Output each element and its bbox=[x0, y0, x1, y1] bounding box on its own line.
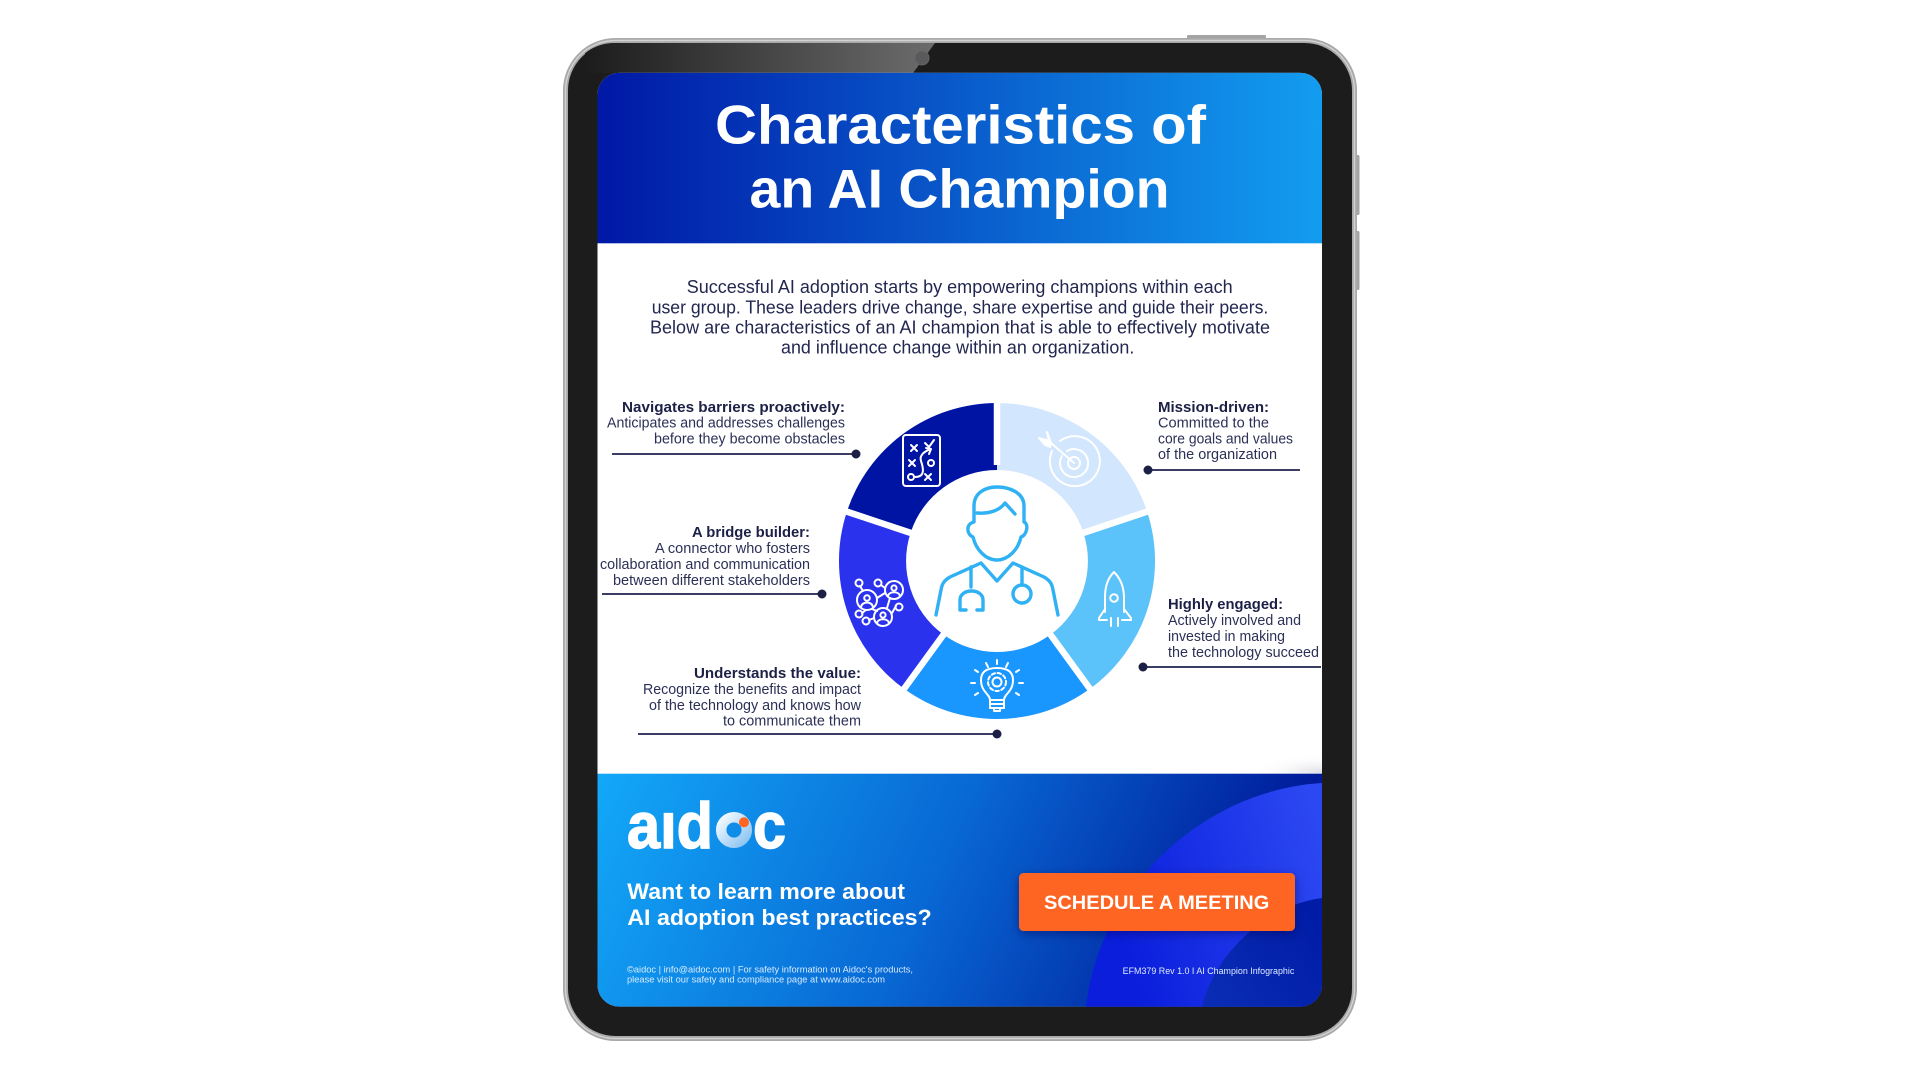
segment: understands the value bbox=[904, 635, 1090, 719]
icon: playbook board bbox=[903, 435, 940, 486]
logo: aidoc bbox=[627, 789, 786, 862]
intro paragraph: Successful AI adoption starts by empowering champions within each bbox=[687, 277, 1233, 297]
footer shadow bbox=[1287, 763, 1322, 774]
frame highlight bbox=[566, 40, 1354, 1038]
camera bbox=[915, 51, 929, 65]
segment gaps bbox=[842, 398, 1152, 693]
call to action text: Want to learn more about bbox=[627, 879, 906, 904]
footer band bbox=[598, 774, 1322, 1007]
footer large curve bbox=[1086, 783, 1322, 1007]
call to action text: AI adoption best practices? bbox=[627, 905, 932, 930]
logo: aidoc: c bbox=[753, 789, 786, 862]
callout: navigates barriers proactively: Anticipates and addresses challenges bbox=[607, 416, 845, 432]
segment: navigates barriers bbox=[847, 403, 997, 533]
header band bbox=[598, 73, 1322, 243]
tablet bezel bbox=[566, 40, 1354, 1038]
callout: highly engaged: Highly engaged: bbox=[1168, 597, 1283, 613]
title: an AI Champion bbox=[750, 158, 1170, 220]
callout: mission-driven: Committed to the bbox=[1158, 416, 1269, 432]
intro paragraph: user group. These leaders drive change, share expertise and guide their peers. bbox=[652, 297, 1268, 317]
title bbox=[715, 93, 1207, 220]
footer document reference: EFM379 Rev 1.0 I AI Champion Infographic bbox=[1123, 966, 1295, 976]
callout: bridge builder: A bridge builder: bbox=[692, 525, 810, 541]
segment: bridge builder bbox=[839, 512, 944, 689]
callout: navigates barriers proactively: before they become obstacles bbox=[654, 432, 845, 448]
callout: bridge builder: between different stakeholders bbox=[613, 573, 810, 589]
callout: highly engaged bbox=[1138, 597, 1321, 672]
button: schedule a meeting: SCHEDULE A MEETING bbox=[1044, 892, 1269, 914]
intro paragraph bbox=[650, 277, 1270, 357]
callout: understands the value: Recognize the benefits and impact bbox=[643, 682, 861, 698]
icon: target with arrow bbox=[1039, 432, 1100, 486]
callout: understands the value: of the technology and knows how bbox=[649, 698, 862, 714]
callout: navigates barriers proactively bbox=[607, 400, 860, 458]
callout: highly engaged: the technology succeed bbox=[1168, 645, 1319, 661]
icon: lightbulb gear bbox=[971, 660, 1023, 711]
callout: mission-driven: core goals and values bbox=[1158, 432, 1293, 448]
callout: bridge builder: A connector who fosters bbox=[655, 541, 810, 557]
screen bbox=[598, 73, 1392, 1007]
logo dot bbox=[739, 817, 749, 827]
icon: network of people bbox=[856, 580, 903, 626]
donut chart bbox=[839, 398, 1155, 719]
footer small curve bbox=[1202, 898, 1322, 1007]
tablet device frame bbox=[566, 35, 1360, 1038]
side and top hardware buttons bbox=[1187, 35, 1360, 290]
callout: highly engaged: Actively involved and bbox=[1168, 613, 1301, 629]
title: Characteristics of bbox=[715, 93, 1207, 155]
icon: doctor bbox=[936, 487, 1058, 615]
segment: highly engaged bbox=[1050, 512, 1155, 689]
callout: mission-driven bbox=[1144, 400, 1300, 474]
callout: mission-driven: of the organization bbox=[1158, 447, 1277, 463]
white screen background bbox=[598, 73, 1322, 1007]
footer legal text: ©aidoc | info@aidoc.com | For safety information on Aidoc's products, bbox=[627, 965, 913, 975]
icon: rocket bbox=[1099, 572, 1131, 626]
callout: understands the value bbox=[638, 666, 1002, 738]
callout: highly engaged: invested in making bbox=[1168, 629, 1285, 645]
callout: mission-driven: Mission-driven: bbox=[1158, 400, 1269, 416]
callout: bridge builder: collaboration and communication bbox=[600, 557, 810, 573]
footer legal text bbox=[627, 965, 913, 985]
button: schedule a meeting bbox=[1019, 873, 1295, 931]
callout: understands the value: Understands the value: bbox=[694, 666, 861, 682]
intro paragraph: Below are characteristics of an AI champion that is able to effectively motivate bbox=[650, 317, 1270, 337]
segment: mission-driven bbox=[997, 403, 1147, 533]
logo ring bbox=[721, 817, 747, 843]
footer legal text: please visit our safety and compliance page at www.aidoc.com bbox=[627, 975, 885, 985]
screen glare bbox=[585, 43, 935, 73]
logo: aidoc: aıd bbox=[627, 789, 713, 862]
intro paragraph: and influence change within an organization. bbox=[781, 337, 1134, 357]
callout: bridge builder bbox=[600, 525, 826, 598]
callout: understands the value: to communicate them bbox=[723, 714, 861, 730]
callout: navigates barriers proactively: Navigates barriers proactively: bbox=[622, 400, 845, 416]
call to action text bbox=[627, 879, 932, 930]
